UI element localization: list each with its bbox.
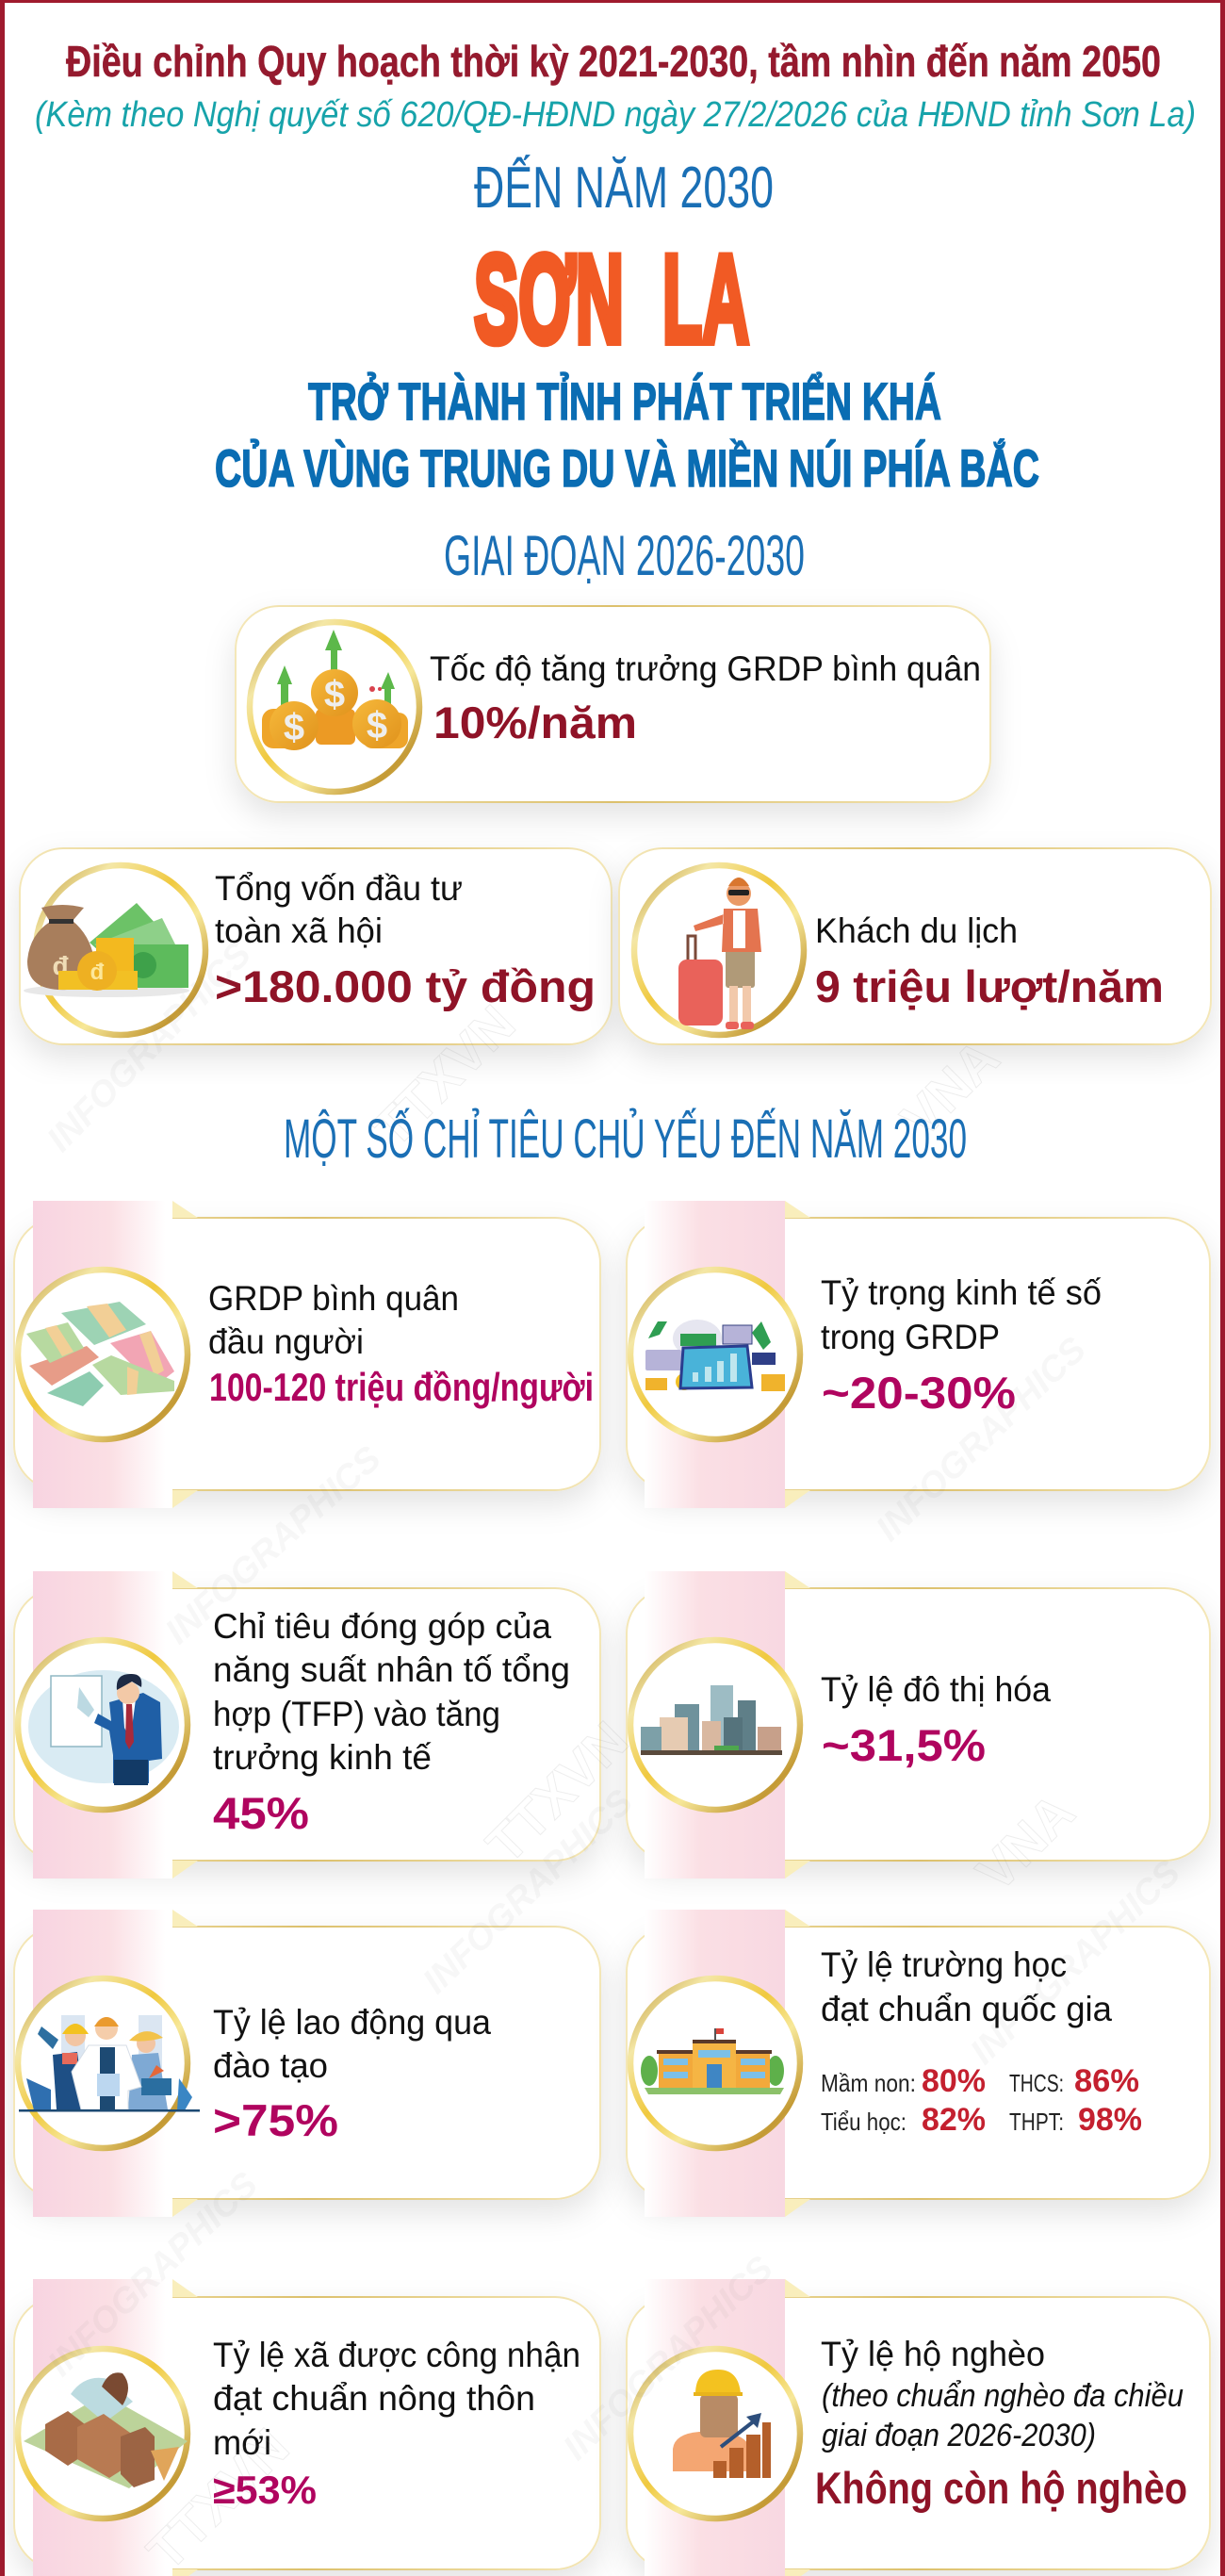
icon: money bag and banknotes xyxy=(24,865,205,1035)
watermarks: INFOGRAPHICS xyxy=(869,1330,1094,1549)
icon: digital dashboard xyxy=(630,1270,800,1439)
icon: city skyline xyxy=(630,1640,800,1810)
label line 2: năng suất nhân tố tổng xyxy=(213,1650,570,1689)
label: Tổng vốn đầu tư xyxy=(215,869,463,908)
watermarks: INFOGRAPHICS xyxy=(556,2249,781,2468)
value: >180.000 tỷ đồng xyxy=(215,961,596,1011)
label line 3: mới xyxy=(213,2423,271,2462)
value: 45% xyxy=(213,1788,309,1838)
label: Tỷ lệ lao động qua xyxy=(213,2003,491,2042)
icon: worker with rising bars xyxy=(630,2349,800,2519)
watermarks: INFOGRAPHICS xyxy=(158,1439,389,1652)
label: Tỷ lệ xã được công nhận xyxy=(213,2336,580,2374)
icon: money bag and banknotes: đ xyxy=(90,960,105,985)
stat: lower secondary xyxy=(1009,2063,1139,2099)
watermarks: VNA xyxy=(965,1781,1086,1902)
label: Tỷ lệ đô thị hóa xyxy=(821,1670,1051,1709)
heading: goal line 1: TRỞ THÀNH TỈNH PHÁT TRIỂN KHÁ xyxy=(308,371,941,431)
icon: coins with arrows xyxy=(250,622,419,792)
panel: digital economy xyxy=(627,1201,1210,1508)
value: 9 triệu lượt/năm xyxy=(815,961,1164,1011)
value: 10%/năm xyxy=(433,697,637,747)
label line 4: trưởng kinh tế xyxy=(213,1738,432,1777)
icon: traveller with suitcase xyxy=(634,865,804,1035)
watermarks: INFOGRAPHICS xyxy=(41,2165,266,2384)
stat: upper secondary: THPT: xyxy=(1009,2108,1064,2136)
heading: Son La: SƠN xyxy=(474,230,624,369)
stat: preschool: Mầm non: xyxy=(821,2069,916,2097)
panel: GRDP growth xyxy=(236,606,990,802)
value: ~20-30% xyxy=(822,1368,1016,1418)
icon: stacks of cash xyxy=(18,1270,188,1439)
stat: lower secondary: 86% xyxy=(1074,2063,1139,2099)
label: Chỉ tiêu đóng góp của xyxy=(213,1607,551,1646)
label line 2: toàn xã hội xyxy=(215,911,383,950)
note line 1: (theo chuẩn nghèo đa chiều xyxy=(822,2378,1184,2414)
icon: money bag and banknotes: đ xyxy=(52,951,69,980)
icon: coins with arrows: $ xyxy=(324,674,345,715)
value: ~31,5% xyxy=(822,1720,986,1770)
label: Tỷ lệ hộ nghèo xyxy=(821,2335,1045,2373)
label line 2: đầu người xyxy=(208,1322,364,1361)
panel: urbanisation xyxy=(627,1571,1210,1879)
note line 2: giai đoạn 2026-2030) xyxy=(822,2418,1096,2453)
icon: presenter at board xyxy=(18,1640,188,1810)
label line 2: đào tạo xyxy=(213,2046,328,2085)
label: GRDP bình quân xyxy=(208,1279,459,1318)
icon: coins with arrows: $ xyxy=(284,707,304,748)
label line 2: đạt chuẩn quốc gia xyxy=(821,1990,1112,2028)
panel: TFP contribution xyxy=(14,1571,600,1879)
icon: school building xyxy=(630,1978,800,2148)
watermarks: INFOGRAPHICS xyxy=(40,934,259,1159)
heading: period 2026-2030: GIAI ĐOẠN 2026-2030 xyxy=(444,524,805,587)
panel: new rural communes xyxy=(14,2279,600,2576)
watermarks: INFOGRAPHICS xyxy=(416,1782,641,2001)
icon: three workers xyxy=(18,1978,200,2148)
label line 3: hợp (TFP) vào tăng xyxy=(213,1695,500,1733)
stat: primary xyxy=(821,2102,986,2138)
panel: trained labour xyxy=(14,1910,600,2217)
panel: poverty rate xyxy=(627,2279,1210,2576)
label: Tỷ lệ trường học xyxy=(821,1945,1067,1984)
watermarks xyxy=(40,934,1188,2576)
label: Khách du lịch xyxy=(815,911,1018,950)
stat: preschool: 80% xyxy=(922,2063,986,2099)
stat: preschool xyxy=(821,2063,986,2099)
panel: standard schools xyxy=(627,1910,1210,2217)
stat: upper secondary: 98% xyxy=(1078,2102,1142,2138)
value: >75% xyxy=(213,2095,338,2145)
label: Tỷ trọng kinh tế số xyxy=(821,1273,1102,1312)
stat: primary: Tiểu học: xyxy=(821,2108,906,2136)
value: 100-120 triệu đồng/người xyxy=(209,1365,594,1409)
stat: upper secondary xyxy=(1009,2102,1142,2138)
stat: primary: 82% xyxy=(922,2102,986,2138)
icon: isometric village xyxy=(18,2349,188,2519)
watermarks: TTXVN xyxy=(362,993,526,1157)
label line 2: đạt chuẩn nông thôn xyxy=(213,2379,535,2418)
heading: Son La: LA xyxy=(662,230,749,369)
watermarks: TTXVN xyxy=(475,1710,639,1874)
icon: coins with arrows: $ xyxy=(367,705,387,747)
panel: total investment xyxy=(20,848,612,1044)
label: Tốc độ tăng trưởng GRDP bình quân xyxy=(430,649,981,688)
heading: by 2030: ĐẾN NĂM 2030 xyxy=(474,156,774,221)
panel: tourists xyxy=(619,848,1211,1044)
stat: lower secondary: THCS: xyxy=(1009,2069,1064,2097)
value: ≥53% xyxy=(213,2468,317,2512)
watermarks: VNA xyxy=(890,1027,1010,1148)
label line 2: trong GRDP xyxy=(821,1318,1000,1356)
watermarks: INFOGRAPHICS xyxy=(963,1853,1188,2072)
panel: GRDP per capita xyxy=(14,1201,600,1508)
